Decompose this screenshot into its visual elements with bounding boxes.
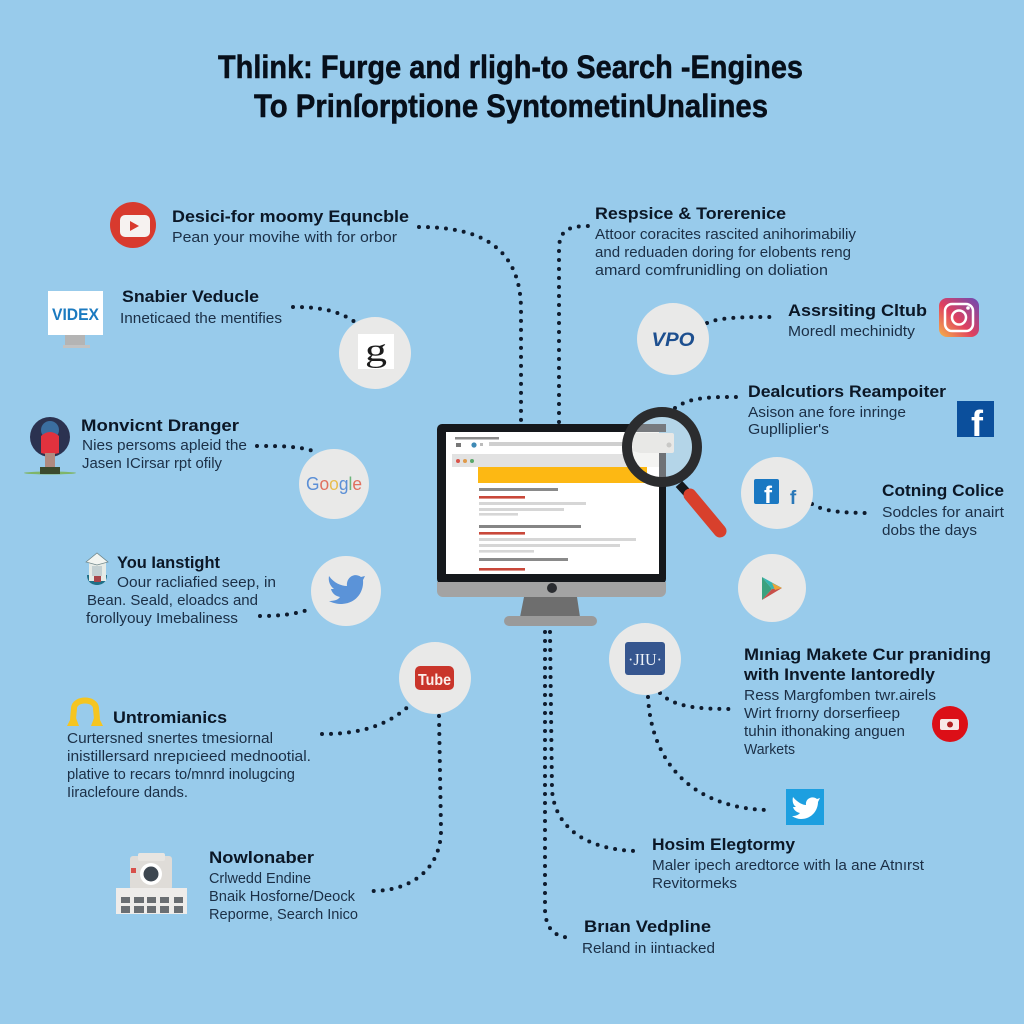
item: Untromianics	[67, 700, 311, 801]
icon: camera on building	[116, 853, 187, 914]
item: Untromianics: Curtersned snertes tmesiornal	[67, 731, 273, 747]
icon: VIDEX monitor	[48, 291, 103, 348]
icon: VPO circle	[637, 303, 709, 375]
icon: person figure	[24, 417, 76, 474]
magnifying glass	[620, 405, 720, 531]
monitor base	[504, 616, 597, 626]
item: Assrsiting Cltub	[788, 298, 979, 340]
icon: Play circle	[738, 554, 806, 622]
item: Mıniag Makete Cur praniding	[743, 645, 991, 758]
item: Mıniag Makete Cur praniding: Wirt frıorny dorserfieep	[744, 706, 900, 722]
item: Dealcutiors Reampoiter: Asison ane fore inringe	[748, 405, 906, 421]
connector: YouTube circle to camera item	[372, 716, 441, 891]
item: Nowlonaber: Reporme, Search Inico	[209, 907, 358, 923]
item: Monvicnt Dranger: Jasen ICirsar rpt ofily	[82, 456, 223, 472]
item: Nowlonaber	[116, 848, 358, 923]
connector: person item to Google circle	[257, 446, 316, 452]
item: Mıniag Makete Cur praniding: Ress Margfomben twr.airels	[744, 688, 936, 704]
item: Untromianics: plative to recars to/mnrd inolugcing	[67, 767, 295, 783]
connector: video item to g circle	[293, 307, 355, 322]
item: Snabier Veducle	[48, 287, 282, 348]
item: Monvicnt Dranger: Nies persoms apleid the	[82, 438, 247, 454]
icon: VIDEX monitor: VIDEX	[52, 305, 100, 324]
item: Respsice & Torerenice: and reduaden doring for elobents reng	[595, 245, 851, 261]
item: Dealcutiors Reampoiter: Guplliplier's	[748, 422, 829, 438]
item: Nowlonaber: Nowlonaber	[209, 848, 314, 867]
icon: Facebook square: f	[971, 403, 984, 444]
item: Snabier Veducle: Inneticaed the mentifies	[120, 311, 282, 327]
item: Assrsiting Cltub: Assrsiting Cltub	[788, 301, 927, 320]
icon: small tower	[86, 553, 108, 585]
icon: golden arch	[67, 700, 103, 726]
title: Thlink: Furge and rligh-to Search -Engines	[218, 49, 803, 85]
item: Dealcutiors Reampoiter	[748, 382, 994, 444]
item: Hosim Elegtormy: Maler ipech aredtorce with la ane Atnırst	[652, 858, 924, 874]
item: You Ianstight: Bean. Seald, eloadcs and	[87, 593, 258, 609]
icon: Facebook circle: f	[764, 482, 773, 509]
item: Assrsiting Cltub: Moredl mechinidty	[788, 324, 916, 340]
item: Nowlonaber: Crlwedd Endine	[209, 871, 311, 887]
item: You Ianstight: forollyouy Imebaliness	[86, 611, 238, 627]
title	[218, 49, 803, 124]
connector: tower item to Twitter circle	[260, 608, 313, 616]
icon: Tube circle: Tube	[418, 672, 451, 689]
connector: JU circle to market item	[660, 693, 735, 709]
icon: Facebook circle	[741, 457, 813, 529]
item: Respsice & Torerenice: amard comfrunidling on doliation	[595, 263, 828, 279]
item: Monvicnt Dranger: Monvicnt Dranger	[81, 416, 239, 435]
item: Desici-for moomy Equncble: Pean your movihe with for orbor	[172, 230, 397, 246]
item: Respsice & Torerenice: Respsice & Torerenice	[595, 204, 786, 223]
item: Hosim Elegtormy	[652, 835, 924, 892]
orange banner	[478, 467, 647, 483]
monitor chin	[437, 582, 666, 597]
search results	[479, 488, 636, 571]
item: You Ianstight: You Ianstight	[117, 553, 220, 572]
icon: Instagram	[939, 298, 979, 337]
item: Cotning Colice: dobs the days	[882, 523, 977, 539]
connector: JU circle to twitter square	[648, 697, 772, 810]
item: Cotning Colice: Sodcles for anairt	[882, 505, 1004, 521]
item: Untromianics: Untromianics	[113, 708, 227, 727]
handle	[679, 484, 691, 497]
icon: red camera circle	[932, 706, 968, 742]
item: Mıniag Makete Cur praniding: Mıniag Makete Cur praniding	[744, 645, 991, 664]
icon: JU circle: ·JIU·	[628, 650, 662, 669]
connector: facebook circle to coating item	[812, 504, 872, 513]
item: Respsice & Torerenice	[595, 204, 857, 279]
item: Brıan Vedpline: Reland in iintıacked	[582, 941, 715, 957]
icon: Tube circle	[399, 642, 471, 714]
icon: Google circle: Google	[306, 474, 362, 494]
item: Snabier Veducle: Snabier Veducle	[122, 287, 259, 306]
icon: Facebook circle: f	[790, 488, 797, 509]
power button	[547, 583, 557, 593]
item: You Ianstight	[86, 553, 276, 627]
connector: top left item to monitor	[419, 227, 521, 422]
item: You Ianstight: Oour racliafied seep, in	[117, 575, 276, 591]
icon: Twitter circle	[311, 556, 381, 626]
monitor stand	[520, 597, 580, 617]
item: Mıniag Makete Cur praniding: with Invente lantoredly	[743, 665, 936, 684]
icon: g circle	[339, 317, 411, 389]
monitor bezel	[437, 424, 666, 584]
connector: monitor to brian item	[545, 632, 572, 938]
title: To Prinſorptione SyntometinUnalines	[254, 88, 768, 124]
item: Mıniag Makete Cur praniding: Warkets	[744, 742, 795, 758]
item: Nowlonaber: Bnaik Hosforne/Deock	[209, 889, 356, 905]
item: Hosim Elegtormy: Hosim Elegtormy	[652, 835, 796, 854]
connector: magnifier to dealer item	[675, 397, 738, 408]
item: Brıan Vedpline	[582, 917, 715, 957]
connector: monitor to hosting item	[550, 632, 640, 851]
item: Cotning Colice: Cotning Colice	[882, 481, 1004, 500]
item: Respsice & Torerenice: Attoor coracites rascited anihorimabiliy	[595, 227, 857, 243]
icon: Google circle	[299, 449, 369, 519]
item: Monvicnt Dranger	[24, 416, 247, 474]
item: Mıniag Makete Cur praniding: tuhin ithonaking anguen	[744, 724, 905, 740]
monitor illustration	[437, 424, 666, 626]
item: Untromianics: inistillersard nrepıcieed mednootial.	[67, 749, 311, 765]
lens interior	[632, 417, 692, 477]
lens ring	[627, 412, 697, 482]
icon: red video button	[110, 202, 156, 248]
item: Desici-for moomy Equncble	[110, 202, 409, 248]
screen	[446, 432, 659, 574]
icon: JU circle	[609, 623, 681, 695]
connector: VPO circle to club item	[707, 317, 775, 323]
icon: VPO circle: VPO	[652, 330, 695, 351]
item: Hosim Elegtormy: Revitormeks	[652, 876, 737, 892]
item: Cotning Colice	[882, 481, 1004, 539]
icon: Twitter square	[786, 789, 824, 825]
icon: Facebook square	[957, 401, 994, 444]
item: Brıan Vedpline: Brıan Vedpline	[584, 917, 711, 936]
connector: arch item to YouTube circle	[322, 705, 410, 734]
item: Desici-for moomy Equncble: Desici-for moomy Equncble	[172, 207, 409, 226]
item: Dealcutiors Reampoiter: Dealcutiors Reampoiter	[748, 382, 946, 401]
item: Untromianics: Iiraclefoure dands.	[67, 785, 188, 801]
icon: g circle: g	[365, 333, 387, 369]
browser chrome	[452, 437, 659, 467]
connector: top right item to monitor	[559, 226, 588, 422]
